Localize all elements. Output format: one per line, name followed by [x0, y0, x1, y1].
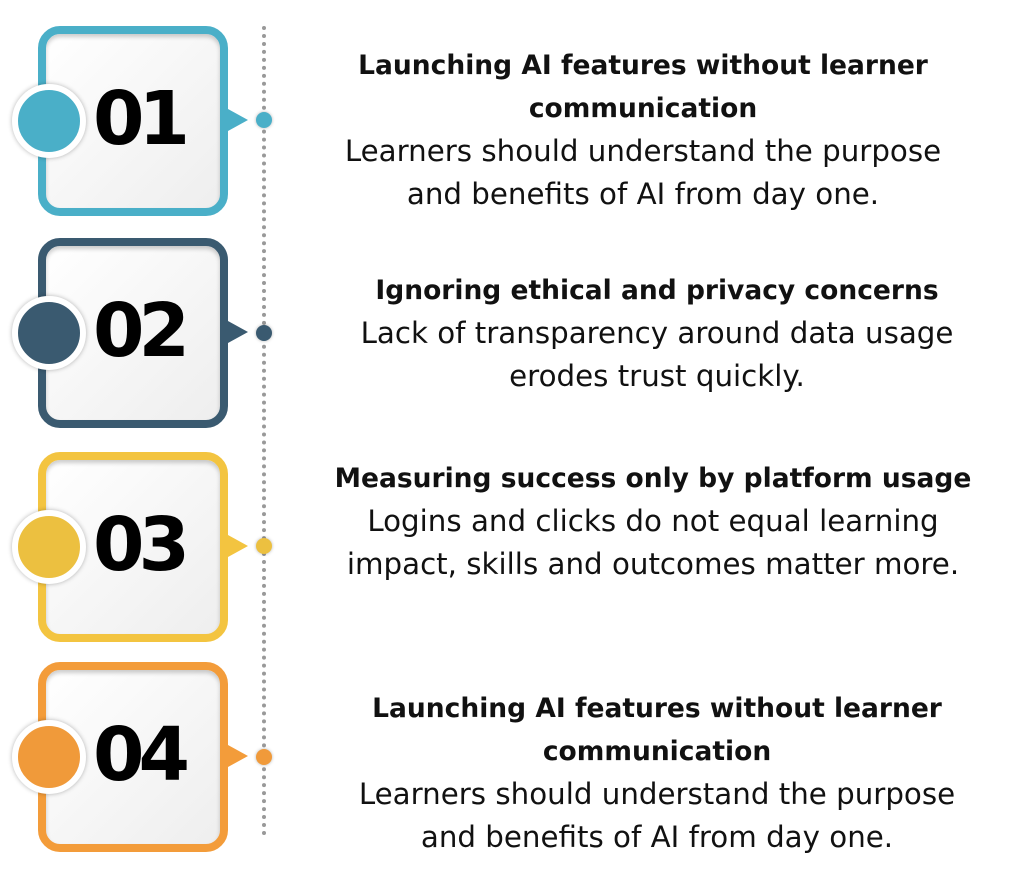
text 04: Launching AI features without learner [372, 693, 942, 724]
card 02: 02 [93, 288, 184, 374]
text 01: and benefits of AI from day one. [407, 177, 879, 211]
card 02 [10, 238, 248, 428]
card 04: 04 [93, 712, 184, 798]
card 01: 01 [93, 76, 184, 162]
text 04: and benefits of AI from day one. [421, 820, 893, 854]
dot 02 [256, 325, 272, 341]
dot 04 [256, 749, 272, 765]
text 01: Launching AI features without learner [358, 50, 928, 81]
text 03: Measuring success only by platform usage [335, 463, 971, 494]
text 01: communication [529, 93, 757, 124]
text 04: Learners should understand the purpose [359, 777, 955, 811]
card 01 [10, 26, 248, 216]
text 04 [359, 693, 955, 854]
text 02 [361, 275, 953, 393]
text 04: communication [543, 736, 771, 767]
card 04 [10, 662, 248, 852]
text 03 [335, 463, 971, 581]
text 01: Learners should understand the purpose [345, 134, 941, 168]
dot 01 [256, 112, 272, 128]
text 03: impact, skills and outcomes matter more. [347, 547, 959, 581]
dotted timeline line [262, 26, 266, 836]
text 01 [345, 50, 941, 211]
card 03 [10, 452, 248, 642]
text 02: Lack of transparency around data usage [361, 316, 953, 350]
dot 03 [256, 538, 272, 554]
text 03: Logins and clicks do not equal learning [367, 504, 939, 538]
text 02: erodes trust quickly. [509, 359, 805, 393]
text 02: Ignoring ethical and privacy concerns [375, 275, 939, 306]
card 03: 03 [93, 502, 184, 588]
